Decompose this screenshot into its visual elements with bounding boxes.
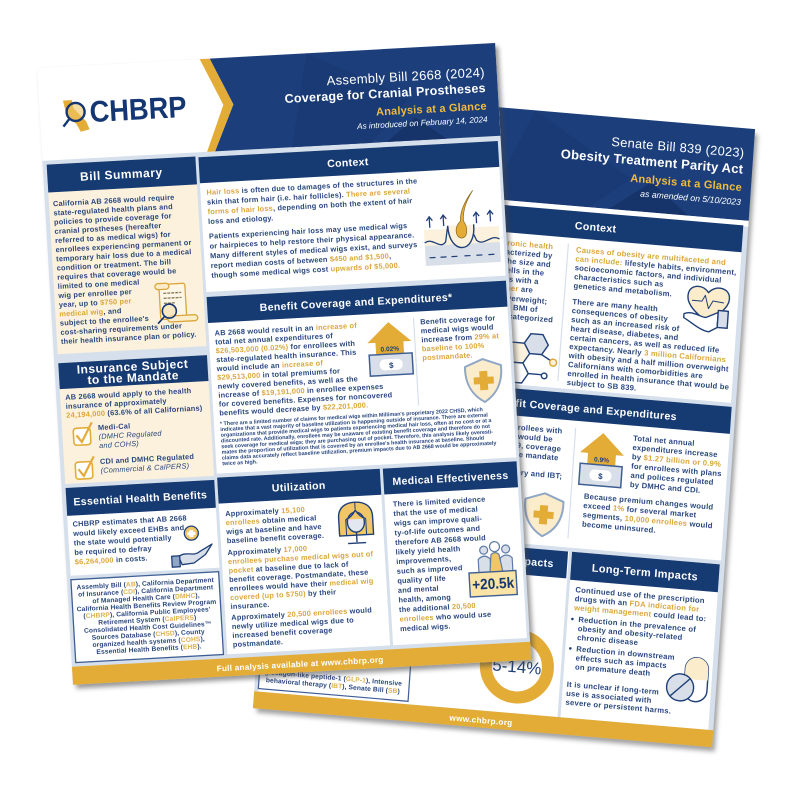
coverage name: Coverage for Cranial Prostheses bbox=[284, 81, 486, 106]
context left text: Obesity is a chronic health bbox=[450, 234, 554, 251]
panel: insurance subject to the mandate: Insurance Subject bbox=[76, 357, 189, 377]
long-term text: drugs with an FDA indication for bbox=[575, 594, 700, 614]
benefit right text: become uninsured. bbox=[582, 520, 656, 535]
panel: bill summary bbox=[47, 156, 206, 354]
icon: house with bill bbox=[578, 431, 625, 488]
footer band: Full analysis available at www.chbrp.org bbox=[216, 655, 384, 673]
abbreviations box: of Insurance (CDI), California Department bbox=[78, 584, 214, 599]
panel: utilization: Utilization bbox=[272, 480, 326, 495]
icon: hair follicle bbox=[422, 189, 501, 266]
long-term text: chronic disease bbox=[577, 633, 639, 647]
abbreviations box: Retirement System (CalPERS) bbox=[98, 614, 197, 627]
context text: or hairpieces to help restore their physical appearance. bbox=[209, 230, 415, 251]
abbreviations box: of Managed Health Care (DMHC), bbox=[92, 592, 200, 605]
analysis label: Analysis at a Glance bbox=[376, 101, 487, 119]
context right text: Causes of obesity are multifaceted and bbox=[576, 245, 726, 267]
footnote: * There are a limited number of claims for medical wigs within Milliman's proprietary 2022 CHSD, which bbox=[220, 407, 483, 427]
medical effectiveness text: health, among bbox=[398, 593, 452, 605]
EHB text: $6,264,000 in costs. bbox=[75, 554, 148, 567]
panel: benefit coverage and expenditures bbox=[207, 281, 516, 474]
long-term text: on premature death bbox=[575, 662, 651, 678]
utilization text: Approximately 20,500 enrollees would bbox=[231, 605, 372, 622]
panel: bill summary: Bill Summary bbox=[80, 165, 163, 184]
panel: essential health benefits: Essential Health Benefits bbox=[73, 489, 207, 509]
context right text: There are many health bbox=[572, 297, 658, 313]
context left text: categorized as overweight; bbox=[443, 288, 548, 306]
context left text: number of fat cells in the bbox=[448, 260, 545, 278]
context right text: subject to SB 839. bbox=[566, 378, 637, 393]
context text: though some medical wigs cost upwards of $5,000. bbox=[211, 261, 400, 280]
context text: forms of hair loss, depending on both the extent of hair bbox=[207, 196, 413, 216]
panel: context bbox=[281, 187, 743, 403]
panel: context: Context bbox=[574, 220, 617, 236]
CDI and DMHC label: (Commercial & CalPERS) bbox=[100, 461, 190, 475]
utilization text: benefit coverage. Postmandate, these bbox=[229, 568, 369, 584]
benefit right text: baseline to 100% bbox=[422, 341, 485, 353]
medical effectiveness text: There is limited evidence bbox=[393, 495, 486, 509]
long-term text: weight management could lead to: bbox=[573, 603, 707, 623]
context right text: can include: lifestyle habits, environment, bbox=[575, 254, 737, 277]
benefit right text bbox=[582, 430, 724, 540]
footnote bbox=[220, 406, 497, 467]
bill summary text: policies to provide coverage for bbox=[54, 211, 172, 227]
panel: context: Context bbox=[327, 156, 369, 170]
context text: Hair loss is often due to damages of the structures in the bbox=[206, 176, 418, 197]
icon: checkbox CDI and DMHC bbox=[75, 456, 95, 479]
bill summary text: state-regulated health plans and bbox=[53, 202, 173, 217]
panel: medical effectiveness: Medical Effectiveness bbox=[392, 470, 509, 488]
context left text: BMI of 25 or higher are bbox=[445, 278, 534, 295]
benefit right text bbox=[420, 313, 501, 362]
CDI and DMHC label bbox=[100, 452, 195, 475]
context right text: Californians with comorbidities are bbox=[568, 360, 704, 380]
panel: benefit coverage and expenditures bbox=[270, 369, 732, 560]
long-term text bbox=[565, 585, 708, 718]
long-term text: use is associated with bbox=[566, 689, 652, 705]
footnote: mates the proportion of utilization that is covered by an enrollee's health insurance at baseline. Should bbox=[222, 436, 484, 456]
benefit text: newly covered benefits, as well as the bbox=[218, 374, 358, 391]
benefit text bbox=[213, 319, 393, 418]
insurance text bbox=[65, 385, 203, 420]
EHB text: be required to defray bbox=[74, 544, 153, 557]
context text: loss and etiology. bbox=[208, 213, 274, 226]
icon: house with bill: $ bbox=[598, 472, 603, 481]
medical effectiveness text: wigs can improve quali- bbox=[393, 514, 483, 528]
sheet: Senate Bill 839 bbox=[253, 90, 758, 751]
context right text: characteristics such as bbox=[574, 272, 664, 289]
bill summary text: limited to one medical bbox=[58, 277, 140, 291]
benefit right text: medical wigs would bbox=[421, 322, 494, 335]
icon: California with magnifier bbox=[62, 99, 90, 133]
utilization text: wigs at baseline and have bbox=[225, 522, 322, 536]
abbreviations box bbox=[71, 572, 223, 663]
sheet: Assembly Bill 2668 bbox=[37, 43, 534, 689]
abbreviations box: Consolidated Health Cost Guidelines™ bbox=[84, 621, 212, 635]
abbreviations box: California Health Benefits Review Program bbox=[77, 599, 216, 613]
EHB text: the state would potentially bbox=[73, 533, 173, 548]
abbreviations box: Sources Database (CHSD), County bbox=[92, 629, 205, 642]
medical effectiveness text: quality of life bbox=[397, 574, 446, 585]
utilization text: insurance. bbox=[230, 600, 270, 611]
medical effectiveness text: and mental bbox=[398, 584, 439, 595]
context right text: heart disease, diabetes, and bbox=[570, 324, 679, 342]
utilization text bbox=[224, 501, 379, 649]
medical effectiveness text bbox=[392, 495, 493, 633]
footer band bbox=[72, 642, 531, 685]
icon: pills bbox=[666, 655, 709, 703]
CDI and DMHC label: CDI and DMHC Regulated bbox=[100, 452, 195, 466]
insurance text: 24,194,000 (63.6% of all Californians) bbox=[66, 403, 203, 420]
bill summary text: enrollees experiencing permanent or bbox=[55, 238, 192, 254]
panel: benefit coverage and expenditures: Benefit Coverage and Expenditures bbox=[488, 395, 677, 423]
context right text: consequences of obesity bbox=[571, 306, 669, 323]
EHB text: would likely exceed EHBs and bbox=[72, 523, 185, 538]
benefit text: benefits would decrease by $22,201,000. bbox=[219, 400, 369, 418]
panel: long-term impacts bbox=[561, 552, 720, 730]
amendment date: as amended on 5/10/2023 bbox=[640, 189, 741, 207]
utilization text: postmandate. bbox=[233, 637, 283, 649]
long-term text: Continued use of the prescription bbox=[575, 585, 705, 605]
footnote: twice as high. bbox=[222, 459, 258, 467]
panel: medical effectiveness bbox=[383, 461, 527, 645]
medical effectiveness text: ty-of-life outcomes and bbox=[394, 524, 481, 537]
context right text: certain cancers, as well as reduced life bbox=[570, 333, 720, 355]
icon: wig on stand bbox=[338, 501, 374, 544]
benefit text: total net annual expenditures of bbox=[215, 331, 333, 346]
utilization text: Approximately 15,100 bbox=[225, 505, 305, 518]
benefit text: AB 2668 would result in an increase of bbox=[214, 321, 357, 338]
utilization text: pocket at baseline due to lack of bbox=[228, 560, 349, 575]
medical effectiveness text: the additional 20,500 bbox=[399, 601, 476, 614]
header band bbox=[200, 43, 501, 152]
Medi-Cal label: and COHS) bbox=[99, 439, 140, 450]
panel: utilization bbox=[217, 469, 390, 654]
context text: Patients experiencing hair loss may use medical wigs bbox=[209, 221, 408, 241]
benefit left text: subject to SB 839, coverage bbox=[454, 435, 562, 454]
utilization text: increased benefit coverage bbox=[232, 626, 333, 640]
context right text: expectancy. Nearly 3 million Californians bbox=[569, 342, 726, 364]
abbreviations box: Essential Health Benefits (EHB). bbox=[96, 643, 202, 656]
footnote: organizations that provide medical wigs to patients experiencing medical hair loss, often at no cost or at a bbox=[221, 418, 493, 439]
icon: house with bill bbox=[366, 321, 413, 376]
Medi-Cal label: (DMHC Regulated bbox=[98, 429, 163, 441]
medical effectiveness text: improvements, bbox=[396, 554, 451, 566]
benefit right text: for enrollees with plans bbox=[631, 462, 722, 478]
utilization text: Approximately 17,000 bbox=[227, 544, 307, 557]
panel: long-term impacts: Long-Term Impacts bbox=[591, 563, 698, 584]
footnote: discounted rate. Additionally, enrollees may be unaware of existing benefit coverage and therefore do not bbox=[221, 424, 490, 444]
bill summary text bbox=[52, 192, 197, 346]
long-term text: severe or persistent harms. bbox=[565, 698, 671, 716]
benefit right text: Because premium changes would bbox=[584, 492, 714, 512]
benefit left text bbox=[452, 417, 566, 481]
utilization text: enrollees obtain medical bbox=[225, 513, 317, 527]
context left text: 30 or more are categorized bbox=[450, 307, 553, 324]
context right text: such as an increased risk of bbox=[571, 315, 680, 333]
icon: shield bbox=[523, 492, 564, 538]
benefit right text: by $1.27 billion or 0.9% bbox=[632, 452, 721, 469]
benefit left text: would meet the mandate bbox=[463, 445, 559, 462]
panel: insurance subject to the mandate bbox=[58, 355, 214, 484]
context left text: condition characterized by bbox=[450, 243, 553, 260]
EHB text bbox=[71, 513, 189, 567]
benefit right text: increase from 29% at bbox=[421, 331, 500, 344]
benefit text: $29,513,000 in total premiums for bbox=[217, 366, 340, 382]
icon: shield bbox=[464, 358, 503, 403]
stat box: +20.5k bbox=[472, 575, 515, 594]
medical effectiveness text: therefore AB 2668 would bbox=[395, 533, 486, 547]
bill summary text: medical wig, and bbox=[59, 306, 122, 318]
bill summary text: wig per enrollee per bbox=[57, 287, 132, 300]
long-term text: Reduction in the prevalence of bbox=[578, 615, 697, 634]
abbreviations box: Assembly Bill (AB), California Department bbox=[76, 577, 215, 591]
benefit text: state-regulated health insurance. This bbox=[216, 348, 357, 364]
benefit text: increase of $19,191,000 in enrollee expenses bbox=[218, 382, 384, 400]
footnote: indicates that a vast majority of baseline utilization is happening outside of insurance. There are external bbox=[220, 412, 489, 433]
bill title: Assembly Bill 2668 (2024) bbox=[326, 65, 485, 88]
benefit left text: plans that would be bbox=[477, 428, 554, 444]
insurance text: AB 2668 would apply to the health bbox=[65, 386, 192, 402]
benefit right text: exceed 1% for several market bbox=[583, 501, 697, 520]
context right text: with obesity and a half million overweight bbox=[567, 351, 729, 374]
abbreviations box: glucagon-like peptide-1 (GLP-1), Intensive bbox=[264, 669, 402, 688]
footer band bbox=[253, 691, 713, 747]
utilization text: enrollees purchase medical wigs out of bbox=[228, 549, 374, 566]
long-term text: Reduction in downstream bbox=[576, 644, 675, 662]
benefit right text: postmandate. bbox=[422, 351, 473, 362]
bill summary text: California AB 2668 would require bbox=[53, 193, 175, 208]
panel: insurance subject to the mandate: to the Mandate bbox=[87, 368, 179, 387]
benefit right text: by DMHC and CDI. bbox=[630, 480, 701, 495]
long-term text: obesity and obesity-related bbox=[577, 624, 683, 642]
utilization text: newly utilize medical wigs due to bbox=[232, 615, 354, 631]
context left text bbox=[441, 233, 559, 324]
chevron bbox=[200, 57, 236, 152]
context right text: enrolled in health insurance that would be bbox=[567, 369, 730, 392]
benefit text: would include an increase of bbox=[215, 358, 324, 373]
header band bbox=[439, 103, 755, 221]
ring statistic bbox=[484, 633, 550, 700]
Medi-Cal label: Medi-Cal bbox=[98, 421, 131, 432]
analysis label: Analysis at a Glance bbox=[630, 173, 742, 194]
bill summary text: their health insurance plan or policy. bbox=[61, 330, 197, 346]
context text: Many different styles of medical wigs exist, and surveys bbox=[210, 240, 418, 260]
icon: house with bill: $ bbox=[389, 361, 394, 370]
act name: Obesity Treatment Parity Act bbox=[560, 146, 744, 177]
insurance text: insurance of approximately bbox=[66, 396, 168, 411]
utilization text: covered (up to $750) by their bbox=[230, 587, 336, 602]
benefit left text: for GLP-1, surgery and IBT; bbox=[457, 463, 563, 481]
icon: checkbox Medi-Cal bbox=[73, 422, 93, 445]
context text: report median costs of between $450 and $1,500, bbox=[210, 251, 391, 270]
bill summary text: referred to as medical wigs) for bbox=[55, 230, 171, 245]
medical effectiveness text: likely yield health bbox=[395, 544, 461, 557]
utilization text: baseline benefit coverage. bbox=[227, 531, 324, 545]
icon: scroll with magnifier bbox=[155, 282, 198, 324]
context text bbox=[206, 176, 422, 280]
medical effectiveness text: medical wigs. bbox=[400, 622, 451, 633]
EHB text: CHBRP estimates that AB 2668 bbox=[72, 513, 187, 529]
ring statistic: 5-14% bbox=[492, 655, 542, 678]
icon: hand with coin bbox=[170, 525, 213, 567]
benefit right text: segments, 10,000 enrollees would bbox=[582, 510, 713, 530]
Medi-Cal label bbox=[98, 420, 163, 450]
bill summary text: year, up to $750 per bbox=[59, 296, 132, 309]
benefit text: for covered benefits. Expenses for noncovered bbox=[219, 390, 393, 409]
panel: benefit coverage and expenditures: Benefit Coverage and Expenditures* bbox=[259, 292, 453, 314]
abbreviations box bbox=[258, 609, 414, 701]
medical effectiveness text: such as improved bbox=[397, 563, 463, 576]
context right text: socioeconomic factors, and individual bbox=[574, 263, 722, 285]
medical effectiveness text: that the use of medical bbox=[393, 504, 478, 518]
benefit right text: expenditures increase bbox=[632, 443, 719, 459]
long-term text: It is unclear if long-term bbox=[567, 680, 659, 697]
benefit right text: and polices regulated bbox=[630, 471, 714, 487]
footnote: claims data accurately reflect baseline utilization, premium impacts due to AB 2668 would be approximately bbox=[222, 441, 497, 462]
context right text bbox=[565, 245, 739, 401]
bill summary text: temporary hair loss due to a medical bbox=[56, 247, 192, 263]
icon: heart in hand bbox=[683, 285, 730, 333]
icon: group of enrollees bbox=[467, 541, 517, 597]
bill summary text: cranial prostheses (hereafter bbox=[54, 221, 162, 236]
context left text: body. Californians with a bbox=[443, 269, 539, 286]
panel: short-term impacts: Short-Term Impacts bbox=[449, 549, 554, 570]
footer band: www.chbrp.org bbox=[448, 713, 513, 728]
logo: CHBRP bbox=[89, 91, 187, 129]
context left text: those with a BMI of bbox=[464, 299, 538, 314]
abbreviations box: (CHBRP), California Public Employees' bbox=[83, 606, 211, 620]
bill summary text: condition or treatment. The bill bbox=[56, 257, 171, 273]
footnote: seek coverage for medical wigs; they are purchasing out of pocket. Therefore, this analysis likely overesti- bbox=[221, 429, 493, 450]
abbreviations box: behavioral therapy (IBT), Senate Bill (SB) bbox=[266, 677, 400, 696]
benefit right text: Total net annual bbox=[633, 434, 695, 448]
medical effectiveness text: enrollees who would use bbox=[399, 610, 492, 624]
abbreviations box: organized health systems (COHS), bbox=[92, 636, 205, 649]
benefit text: $26,503,000 (0.02%) for enrollees with bbox=[215, 339, 356, 355]
icon: molecule bbox=[504, 332, 558, 386]
logo bbox=[62, 91, 188, 133]
icon: house with bill: 0.02% bbox=[380, 346, 400, 354]
context right text: genetics and metabolism. bbox=[573, 281, 672, 299]
benefit right text: Benefit coverage for bbox=[420, 313, 496, 326]
utilization text: enrollees would have their medical wig bbox=[229, 576, 374, 593]
bill summary text: subject to the enrollee's bbox=[60, 314, 149, 328]
bill title: Senate Bill 839 (2023) bbox=[611, 134, 745, 160]
context left text: an increase in the size and bbox=[448, 251, 551, 269]
context text: skin that form hair (i.e. hair follicles). There are several bbox=[207, 186, 410, 207]
bill summary text: cost-sharing requirements under bbox=[60, 321, 182, 337]
introduction date: As introduced on February 14, 2024 bbox=[356, 115, 488, 131]
bill summary text: requires that coverage would be bbox=[57, 266, 177, 282]
panel: essential health benefits bbox=[66, 480, 219, 576]
icon: house with bill: 0.9% bbox=[594, 456, 609, 465]
long-term text: effects such as impacts bbox=[575, 653, 667, 670]
panel: short-term impacts bbox=[258, 526, 569, 717]
benefit left text: For enrollees with bbox=[493, 421, 563, 436]
panel: context bbox=[198, 141, 506, 292]
